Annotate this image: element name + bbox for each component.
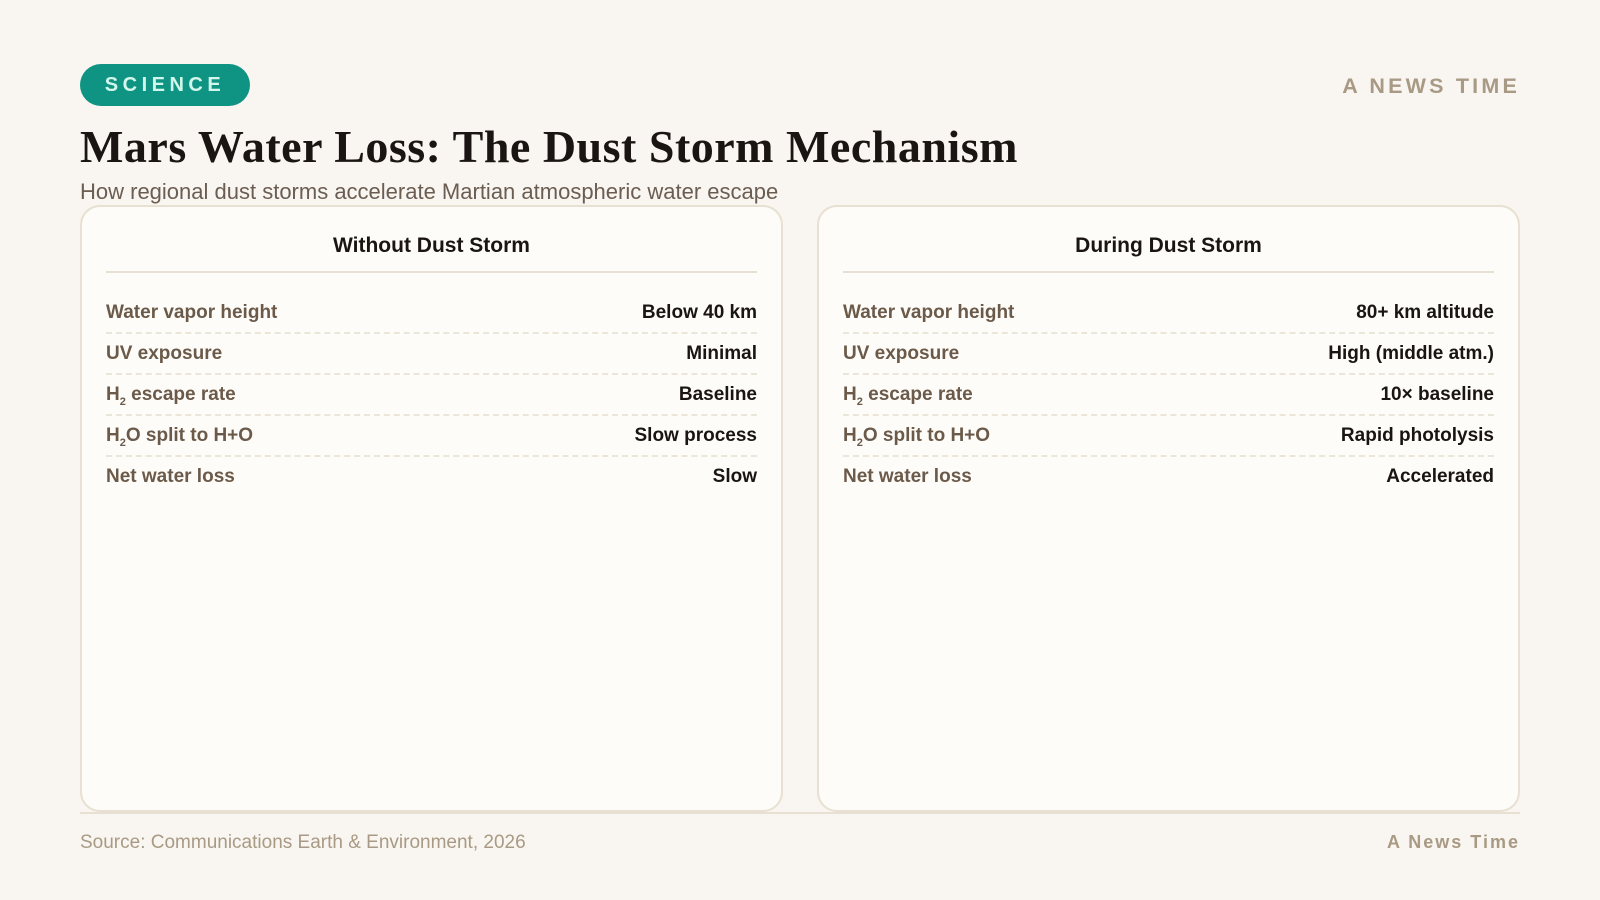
rows: High (middle atm.): [1328, 343, 1494, 364]
rows: Water vapor height: [106, 302, 277, 323]
rows: H2 escape rate: [106, 384, 236, 408]
rows: 10× baseline: [1380, 384, 1494, 405]
rows: Below 40 km: [642, 302, 757, 323]
rows: H2O split to H+O: [843, 425, 990, 449]
panel: without dust storm: [80, 205, 783, 812]
rows: Rapid photolysis: [1341, 425, 1494, 446]
panel heading: [106, 207, 757, 273]
rows: Slow process: [634, 425, 757, 446]
rows: Net water loss: [106, 466, 235, 487]
rows: Baseline: [679, 384, 757, 405]
rows: Water vapor height: [843, 302, 1014, 323]
title: Mars Water Loss: The Dust Storm Mechanism: [80, 121, 1018, 172]
rows: [843, 302, 1494, 487]
rows: H2O split to H+O: [106, 425, 253, 449]
category pill: [80, 64, 250, 106]
source: Source: Communications Earth & Environment, 2026: [80, 832, 526, 853]
footer brand: A News Time: [1387, 832, 1520, 852]
panel heading: During Dust Storm: [1075, 234, 1262, 257]
panel: during dust storm: [817, 205, 1520, 812]
panel heading: [843, 207, 1494, 273]
rows: UV exposure: [106, 343, 222, 364]
rows: H2 escape rate: [843, 384, 973, 408]
rows: UV exposure: [843, 343, 959, 364]
rows: Minimal: [686, 343, 757, 364]
rows: Accelerated: [1386, 466, 1494, 487]
rows: Net water loss: [843, 466, 972, 487]
rows: [106, 302, 757, 487]
rows: 80+ km altitude: [1356, 302, 1494, 323]
panel heading: Without Dust Storm: [333, 234, 530, 257]
rows: Slow: [713, 466, 757, 487]
brand header: A NEWS TIME: [1342, 74, 1520, 98]
category pill: SCIENCE: [105, 74, 225, 96]
subtitle: How regional dust storms accelerate Martian atmospheric water escape: [80, 179, 778, 204]
